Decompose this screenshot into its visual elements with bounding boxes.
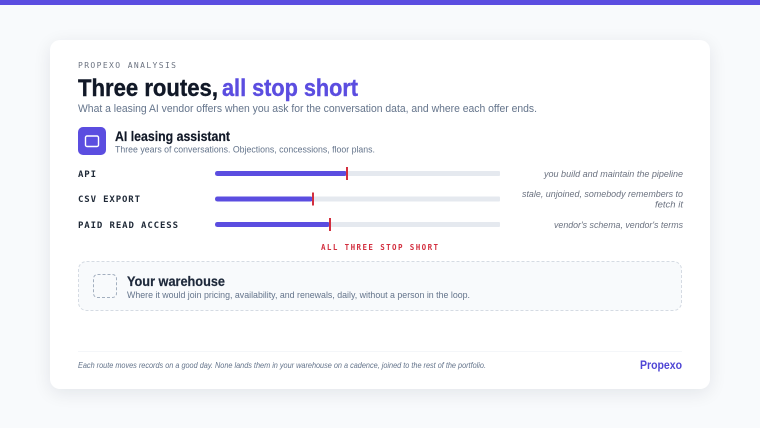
subtitle: What a leasing AI vendor offers when you ask for the conversation data, and where each offer ends. <box>78 103 537 115</box>
route: paid read access <box>78 218 683 231</box>
footer note: Each route moves records on a good day. None lands them in your warehouse on a cadence, joined to the rest of the portfolio. <box>78 361 486 370</box>
route: API: API <box>78 170 96 180</box>
top accent bar <box>0 0 760 5</box>
source heading: AI leasing assistant <box>115 128 230 144</box>
route: CSV export <box>78 189 683 210</box>
panel: your warehouse <box>78 262 682 310</box>
title: all stop short <box>222 75 358 102</box>
callout: all three stop short: ALL THREE STOP SHORT <box>321 243 438 252</box>
route: API: you build and maintain the pipeline <box>543 169 683 180</box>
warehouse heading: Your warehouse <box>127 273 225 289</box>
icon: empty warehouse placeholder <box>94 274 116 298</box>
route: CSV export: fetch it <box>655 200 683 210</box>
route: paid read access: PAID READ ACCESS <box>78 221 178 231</box>
warehouse description: Where it would join pricing, availability, and renewals, daily, without a person in the loop. <box>127 290 470 300</box>
eyebrow label: PROPEXO ANALYSIS <box>78 61 176 70</box>
title <box>78 75 358 102</box>
brand logo text: Propexo <box>640 360 682 372</box>
route: paid read access: vendor's schema, vendor's terms <box>554 220 683 231</box>
route: API <box>78 167 683 180</box>
panel: main card <box>50 40 710 389</box>
route: CSV export: CSV EXPORT <box>78 195 141 205</box>
source description: Three years of conversations. Objections, concessions, floor plans. <box>115 144 375 154</box>
icon: AI assistant screen <box>78 127 106 155</box>
title: Three routes, <box>78 75 218 102</box>
route: CSV export: stale, unjoined, somebody remembers to <box>522 189 683 200</box>
